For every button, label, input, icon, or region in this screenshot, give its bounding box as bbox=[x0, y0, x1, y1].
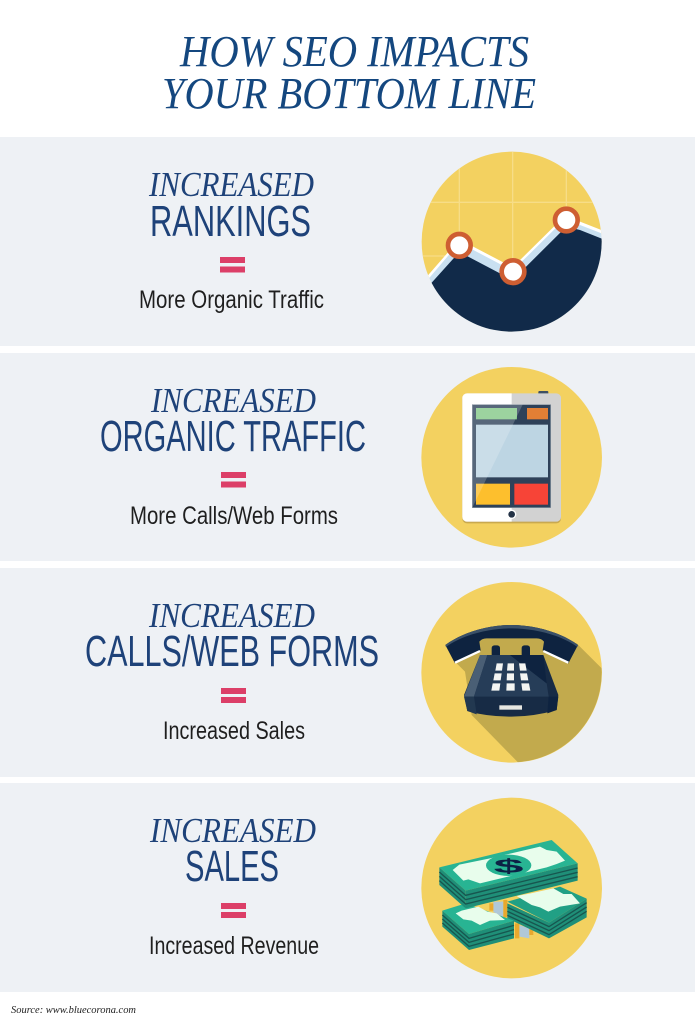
title bbox=[162, 27, 536, 118]
equals sign bbox=[221, 903, 246, 918]
heading: increased organic traffic: ORGANIC TRAFFIC bbox=[100, 413, 366, 461]
text: increased revenue: Increased Revenue bbox=[149, 932, 319, 960]
heading: increased sales bbox=[149, 811, 316, 891]
heading: increased organic traffic bbox=[100, 381, 366, 461]
heading: increased rankings: RANKINGS bbox=[150, 198, 311, 246]
panel: sales bbox=[0, 783, 695, 992]
equals sign bbox=[221, 688, 246, 703]
equals sign bbox=[220, 257, 245, 272]
text: increased sales: Increased Sales bbox=[163, 717, 305, 745]
title: YOUR BOTTOM LINE bbox=[162, 69, 536, 118]
heading: increased rankings: INCREASED bbox=[148, 165, 314, 204]
heading: increased calls/web forms bbox=[85, 596, 379, 676]
text: more calls/web forms: More Calls/Web Forms bbox=[130, 502, 338, 530]
dollar sign: $ bbox=[494, 854, 524, 877]
heading: increased calls/web forms: INCREASED bbox=[148, 596, 315, 635]
icon: telephone bbox=[421, 582, 602, 763]
source note: Source: www.bluecorona.com bbox=[11, 1004, 136, 1016]
icon: line chart bbox=[417, 150, 607, 340]
text: more organic traffic: More Organic Traffic bbox=[139, 286, 324, 314]
icon: stacks of money bbox=[421, 798, 602, 978]
equals sign bbox=[221, 472, 246, 488]
title: HOW SEO IMPACTS bbox=[179, 27, 529, 76]
icon: tablet bbox=[421, 367, 602, 548]
heading: increased rankings bbox=[148, 165, 314, 246]
heading: increased sales: SALES bbox=[185, 843, 279, 891]
panel: calls and web forms bbox=[0, 568, 695, 788]
heading: increased calls/web forms: CALLS/WEB FORMS bbox=[85, 628, 379, 676]
panel: organic traffic bbox=[0, 353, 695, 561]
heading: increased organic traffic: INCREASED bbox=[150, 381, 316, 420]
heading: increased sales: INCREASED bbox=[149, 811, 316, 850]
panel: rankings bbox=[0, 137, 695, 346]
